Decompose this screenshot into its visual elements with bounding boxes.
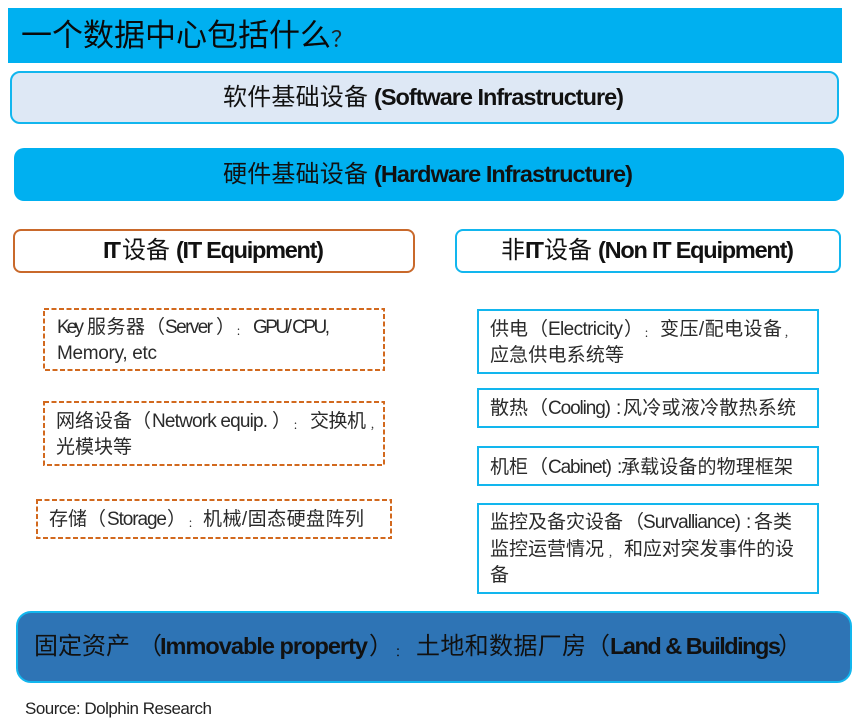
storage text: ） bbox=[167, 508, 186, 530]
surveillance text: 各类 bbox=[754, 511, 792, 533]
hardware infrastructure label: 硬件基础设备 bbox=[223, 161, 368, 188]
electricity text: ） bbox=[624, 318, 643, 340]
surveillance text bbox=[490, 511, 794, 586]
software infrastructure label bbox=[223, 84, 624, 111]
electricity text bbox=[490, 318, 794, 366]
server text: Memory, etc bbox=[57, 343, 157, 364]
cooling text: : bbox=[616, 398, 621, 419]
immovable property text: 固定资产 bbox=[34, 633, 130, 660]
cooling text: 散热 bbox=[490, 397, 528, 419]
network equipment text: Network equip. bbox=[152, 411, 268, 432]
network equipment text: ） bbox=[272, 410, 291, 432]
storage text: Storage bbox=[107, 509, 167, 530]
electricity text: Electricity bbox=[548, 319, 624, 340]
server text: 服务器 bbox=[87, 316, 145, 338]
cabinet text: 机柜 bbox=[490, 456, 528, 478]
network equipment text: ： bbox=[293, 421, 303, 432]
panel: hardware infrastructure bbox=[14, 148, 844, 201]
immovable property text: ） bbox=[369, 633, 393, 660]
storage text: 机械/固态硬盘阵列 bbox=[203, 508, 364, 530]
panel: server bbox=[44, 309, 384, 370]
server text: GPU/ CPU, bbox=[253, 317, 330, 338]
surveillance text: 和应对突发事件的设 bbox=[624, 538, 794, 560]
server text: ： bbox=[236, 327, 246, 338]
network equipment text: 光模块等 bbox=[56, 436, 132, 458]
surveillance text: : bbox=[746, 512, 751, 533]
title text: ？ bbox=[331, 27, 353, 52]
network equipment text bbox=[56, 410, 380, 458]
server text: ） bbox=[216, 316, 235, 338]
hardware infrastructure label bbox=[223, 161, 633, 188]
IT equipment label: IT bbox=[103, 237, 122, 263]
title banner bbox=[8, 8, 842, 63]
source note: Source: Dolphin Research bbox=[25, 699, 212, 718]
network equipment text: ， bbox=[370, 421, 380, 432]
server text: Key bbox=[57, 317, 84, 338]
panel: network equipment bbox=[44, 402, 384, 465]
surveillance text: （ bbox=[625, 511, 644, 533]
panel: electricity bbox=[478, 310, 818, 373]
panel: cooling bbox=[478, 389, 818, 427]
cabinet text: 承载设备的物理框架 bbox=[621, 456, 793, 478]
electricity text: ， bbox=[784, 329, 794, 340]
cabinet text: Cabinet) bbox=[548, 457, 612, 478]
electricity text: 供电 bbox=[490, 318, 528, 340]
immovable property text: （ bbox=[138, 633, 162, 660]
cooling text: （ bbox=[529, 397, 548, 419]
server text bbox=[57, 316, 330, 364]
surveillance text: 监控及备灾设备 bbox=[490, 511, 623, 533]
non-IT equipment label: (Non IT Equipment) bbox=[598, 237, 794, 263]
non-IT equipment label: IT bbox=[525, 237, 545, 263]
storage text: 存储 bbox=[49, 508, 87, 530]
cabinet text bbox=[490, 456, 793, 478]
surveillance text: 监控运营情况 bbox=[490, 538, 604, 560]
network equipment text: 网络设备 bbox=[56, 410, 132, 432]
storage text bbox=[49, 508, 364, 530]
immovable property text: ： bbox=[395, 645, 407, 659]
software infrastructure label: 软件基础设备 bbox=[223, 84, 368, 111]
surveillance text: ， bbox=[608, 549, 618, 560]
title text: 一个数据中心包括什么 bbox=[21, 18, 331, 53]
panel: surveillance bbox=[478, 504, 818, 593]
IT equipment label bbox=[103, 237, 324, 264]
cooling text: Cooling) bbox=[548, 398, 611, 419]
immovable property text: 土地和数据厂房 bbox=[416, 633, 586, 660]
server text: Server bbox=[165, 317, 214, 338]
immovable property text: （ bbox=[586, 633, 610, 660]
immovable property text: Land & Buildings bbox=[610, 633, 781, 659]
electricity text: ： bbox=[644, 329, 654, 340]
IT equipment label: (IT Equipment) bbox=[176, 237, 324, 263]
server text: （ bbox=[146, 316, 165, 338]
panel: immovable property bbox=[17, 612, 851, 682]
panel: storage bbox=[37, 500, 391, 538]
panel: non-IT equipment heading bbox=[456, 230, 840, 272]
cabinet text: : bbox=[617, 457, 622, 478]
cooling text: 风冷或液冷散热系统 bbox=[623, 397, 796, 419]
non-IT equipment label: 非 bbox=[501, 237, 525, 264]
cabinet text: （ bbox=[529, 456, 548, 478]
network equipment text: （ bbox=[132, 410, 151, 432]
cooling text bbox=[490, 397, 796, 419]
electricity text: 应急供电系统等 bbox=[490, 344, 624, 366]
IT equipment label: 设备 bbox=[122, 237, 170, 264]
software infrastructure label: (Software Infrastructure) bbox=[374, 84, 624, 110]
electricity text: 变压/配电设备 bbox=[660, 318, 782, 340]
panel: cabinet bbox=[478, 447, 818, 485]
non-IT equipment label: 设备 bbox=[544, 237, 592, 264]
immovable property text bbox=[34, 633, 802, 660]
storage text: ： bbox=[188, 519, 198, 530]
immovable property text: Immovable property bbox=[160, 633, 368, 659]
network equipment text: 交换机 bbox=[310, 410, 366, 432]
immovable property text: ） bbox=[778, 633, 802, 660]
panel: IT equipment heading bbox=[14, 230, 414, 272]
surveillance text: 备 bbox=[490, 564, 509, 586]
electricity text: （ bbox=[529, 318, 548, 340]
non-IT equipment label bbox=[501, 237, 794, 264]
storage text: （ bbox=[87, 508, 106, 530]
surveillance text: Survalliance) bbox=[643, 512, 741, 533]
hardware infrastructure label: (Hardware Infrastructure) bbox=[374, 161, 633, 187]
panel: software infrastructure bbox=[11, 72, 838, 123]
